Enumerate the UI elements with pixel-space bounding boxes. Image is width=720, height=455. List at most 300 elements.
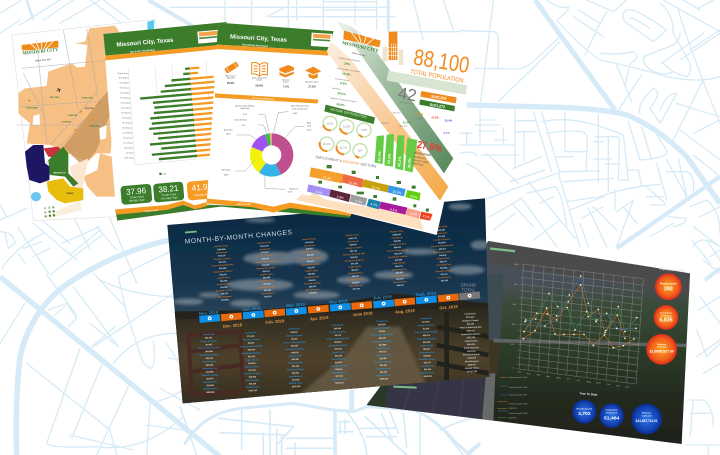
sector block values: 3.1% <box>410 211 418 217</box>
month columns: construction values above the timeline: $71,220 <box>261 252 269 254</box>
month columns: values below the timeline: Swimming Pool <box>288 362 303 365</box>
stat: high school: High School or <box>225 76 237 78</box>
heading: employment and industry: EMPLOYMENT & INDUSTRY SECTORS <box>315 155 377 169</box>
month columns: construction values above the timeline: $49,760 <box>262 263 270 267</box>
month columns: construction values above the timeline: Garage & Carport <box>345 246 362 250</box>
row one sector blocks <box>309 167 421 201</box>
month columns: values below the timeline: $376,418 <box>292 385 301 388</box>
month columns: construction values above the timeline: $28,410 <box>221 292 229 295</box>
demographic stat captions: Black alone <box>381 122 389 124</box>
timeline month labels: Mar. 2019 <box>286 301 306 308</box>
icon: diploma <box>224 61 239 74</box>
big number: 88,100 <box>412 44 471 78</box>
donut labels: 0.6% <box>241 125 246 127</box>
month columns: construction values above the timeline: $61,733 <box>350 250 358 253</box>
month columns: values below the timeline: $28,410 <box>206 377 215 380</box>
map: white gaps <box>33 114 107 140</box>
month columns: values below the timeline: Swimming Pool <box>420 352 435 354</box>
grand total column: Miscellaneous <box>465 361 479 363</box>
education list <box>330 56 360 107</box>
donut labels: 0.5% <box>243 114 247 116</box>
month columns: construction values above the timeline: Single Family <box>437 258 450 261</box>
stat: household income boxes: $100,206 <box>431 95 447 101</box>
month columns: values below the timeline: $63,480 <box>248 362 256 365</box>
income ring values: 21.2% <box>340 146 348 149</box>
month columns: values below the timeline: $59,940 <box>292 358 300 361</box>
decorative band: green <box>336 21 453 173</box>
month columns: construction values above the timeline: Commercial <box>436 231 448 235</box>
stat: 27.6% caption: SERVICES <box>411 163 424 167</box>
sector icons <box>318 165 429 212</box>
heading: reported month: Reported Month <box>659 267 685 273</box>
footer orange strip <box>207 199 352 216</box>
chart axis values <box>511 264 520 369</box>
map: diagonal corridor <box>63 85 113 167</box>
month columns: construction values above the timeline: Remodel & Repair <box>347 277 364 282</box>
month columns: values below the timeline: $47,356 <box>335 347 343 351</box>
month columns: values below the timeline: Residential Addition <box>417 337 437 341</box>
chart legend: 2018 YTD <box>509 408 518 410</box>
stat: bachelor's degree: 27.2% <box>308 85 316 89</box>
small demographic stats: 15.5% <box>403 120 411 124</box>
map: place names: RICHMOND <box>62 122 72 124</box>
month columns: values below the timeline: $31,908 <box>249 376 257 379</box>
month columns: construction values above the timeline: $46,205 <box>220 279 228 283</box>
month columns: construction values above the timeline: $376,418 <box>305 241 315 244</box>
grand total column: $356,008 <box>467 357 477 360</box>
stat: trade area median age: 37.96 <box>126 185 147 197</box>
month columns: values below the timeline: $9,014 <box>379 330 386 333</box>
footer band <box>115 199 221 221</box>
sector block values: 4.1% <box>390 207 398 213</box>
chart month labels: May <box>557 377 562 379</box>
month columns: construction values above the timeline: Swimming Pool <box>216 283 232 286</box>
stat: associate degree: 7.2% <box>283 85 290 89</box>
month columns: construction values above the timeline: $28,230 <box>264 296 273 298</box>
month columns: values below the timeline: $44,908 <box>379 343 387 347</box>
month columns: construction values above the timeline: $58,103 <box>262 258 270 261</box>
month columns: values below the timeline: Remodel & Repair <box>419 358 436 361</box>
month columns: construction values above the timeline: $63,480 <box>263 276 271 279</box>
footer orange strip <box>115 198 220 215</box>
month columns: values below the timeline: $412,330 <box>249 389 258 392</box>
heading: year to date: Year To Date <box>579 391 598 397</box>
grand total label: TOTAL <box>462 288 476 293</box>
month columns: construction values above the timeline: $32,417 <box>440 273 449 276</box>
stat: associate degree: Degree <box>283 81 289 83</box>
chart: age labels: 45 to 49 years <box>121 112 131 115</box>
month columns: construction values above the timeline: Commercial <box>391 236 403 240</box>
stat: some college <box>252 78 267 87</box>
month columns: values below the timeline: Residential Addition <box>285 347 305 351</box>
education list: 29% <box>344 61 351 66</box>
month columns: values below the timeline: Remodel & Repair <box>201 374 219 377</box>
chart legend: Permits Issued in 2018 <box>509 403 527 406</box>
month columns: values below the timeline: $37,615 <box>248 370 257 372</box>
logo: Missouri City: MISSOURI CITY <box>342 41 380 54</box>
month columns: construction values above the timeline: Residential Addition <box>301 262 321 267</box>
map: lower trade area shading <box>83 153 115 197</box>
education list: 8.8% <box>340 81 348 86</box>
donut labels: Pacific Islander alone <box>292 108 308 110</box>
stat: high school <box>225 76 237 85</box>
stat: median age: Median Age <box>194 192 211 197</box>
demographic stat captions: White alone <box>393 111 401 114</box>
stat: median age 42: 42 <box>397 84 418 105</box>
month columns: construction values above the timeline: $66,289 <box>394 240 402 243</box>
green column values: 42.1% <box>397 155 402 167</box>
grand total column: GRAND TOTAL <box>465 366 480 370</box>
month columns: values below the timeline: Residential Addition <box>200 353 220 357</box>
month columns: values below the timeline: $43,620 <box>291 351 299 354</box>
stat: median age <box>187 179 218 201</box>
month columns: construction values above the timeline: Miscellaneous <box>261 293 275 296</box>
grand total column <box>459 312 484 374</box>
month columns: construction values above the timeline: $59,014 <box>394 246 402 249</box>
month columns: values below the timeline: $5,392 <box>291 338 298 341</box>
donut labels: 18.8% <box>224 174 229 176</box>
stat: monthly revenue <box>646 334 677 365</box>
month columns: values below the timeline: $389,866 <box>206 392 216 394</box>
footer text: BIZ.MCTX.ORG <box>237 204 251 206</box>
month columns: values below the timeline: Commercial <box>288 327 300 331</box>
month columns: construction values above the timeline: Commercial <box>304 244 316 248</box>
month columns: values below the timeline: Remodel & Repair <box>330 364 348 368</box>
month columns: construction values above the timeline: $40,066 <box>440 266 448 270</box>
donut labels: Some other Race <box>234 119 247 122</box>
timeline month labels: Nov. 2018 <box>199 309 219 316</box>
stat: monthly revenue: Collected <box>657 346 667 349</box>
map: top corner lake <box>147 20 154 39</box>
education list: Bachelor's <box>332 88 341 91</box>
month columns: values below the timeline: Miscellaneous <box>421 365 435 368</box>
stat: associate degree: Associate <box>282 78 290 81</box>
panel: total population sheet <box>296 20 477 235</box>
sector block values: 5.5% <box>355 199 363 204</box>
stat: monthly permits issued: 393 <box>664 286 673 292</box>
month columns: construction values above the timeline: Commercial <box>259 247 271 251</box>
donut leader lines <box>235 112 304 189</box>
education list: Associate Degree <box>335 77 349 82</box>
timeline bar <box>199 291 480 323</box>
small demographic stats: 20.4% <box>445 119 453 123</box>
month columns: values below the timeline: $68,402 <box>334 327 342 330</box>
month columns: values below the timeline: $32,417 <box>424 361 432 364</box>
grand total column: $604,117 <box>467 329 476 333</box>
map: place names: MISSOURI CITY <box>53 172 67 174</box>
month columns: values below the timeline: $71,220 <box>247 336 255 338</box>
month columns: construction values above the timeline: $37,615 <box>263 283 272 286</box>
stat: YTD permits issued: 3,702 <box>578 411 591 417</box>
month columns: construction values above the timeline: GRAND TOTAL <box>434 225 449 229</box>
grand total column: $441,302 <box>467 350 476 353</box>
month columns: values below the timeline: $46,205 <box>206 363 214 367</box>
month columns: values below the timeline: $29,184 <box>424 368 432 371</box>
grand total column: Single Family <box>465 340 478 343</box>
month columns: values below the timeline: Swimming Pool <box>331 358 346 361</box>
month columns: construction values above the timeline: $412,330 <box>260 244 270 248</box>
month columns: construction values above the timeline: $59,940 <box>308 272 316 276</box>
chart: age labels: 75 to 79 years <box>119 82 129 85</box>
month columns: construction values above the timeline: Miscellaneous <box>306 289 320 292</box>
chart month labels: Jun <box>567 379 571 381</box>
map: place names: SUGAR LAND <box>82 96 94 99</box>
logo: Missouri City <box>342 31 381 58</box>
month columns: construction values above the timeline: $52,014 <box>262 270 271 273</box>
section band: diversity <box>215 93 327 104</box>
map: place names: HOUSTON <box>85 108 94 110</box>
month columns: construction values above the timeline: GRAND TOTAL <box>214 244 229 248</box>
month columns: values below the timeline: GRAND TOTAL <box>376 374 392 377</box>
logo: Missouri City: show me, too <box>35 57 51 63</box>
month columns: construction values above the timeline: $41,900 <box>220 286 229 289</box>
month columns: construction values above the timeline: Swimming Pool <box>259 280 275 283</box>
grand total column: $4,727,103 <box>467 370 478 373</box>
stat: trade area median age: Median Age <box>129 198 145 203</box>
stat: monthly inspections <box>654 305 678 330</box>
lower accent bar <box>393 386 417 389</box>
header title: Missouri City, Texas <box>230 34 288 44</box>
grand total column: $298,471 <box>468 363 477 367</box>
month columns: construction values above the timeline: Miscellaneous <box>218 296 232 299</box>
month columns: values below the timeline: $401,275 <box>335 381 345 385</box>
sector block values: 6.4% <box>315 190 323 195</box>
map: pale lower wash <box>43 200 82 217</box>
map: pale wedge <box>70 158 88 200</box>
education list: Graduate or Professional Degree <box>330 96 357 104</box>
donut labels: 18.4% <box>226 134 231 136</box>
income ring charts <box>320 116 371 158</box>
map: zone navy <box>25 145 50 183</box>
month columns: construction values above the timeline: Residential Addition <box>389 255 409 259</box>
month columns: construction values above the timeline: Fence & Retaining Wall <box>211 263 234 268</box>
chart month labels: Mar <box>537 374 541 377</box>
chart: age labels: 5 to 9 years <box>126 152 134 155</box>
month columns: values below the timeline: $418,092 <box>424 375 433 378</box>
month columns: construction values above the timeline: $43,620 <box>307 266 316 270</box>
small demographic stats: 20.1% <box>416 112 424 116</box>
month columns: construction values above the timeline: Remodel & Repair <box>259 285 276 289</box>
timeline month labels <box>199 290 459 329</box>
month columns: values below the timeline: $30,562 <box>335 369 344 371</box>
month columns: values below the timeline: $54,288 <box>205 350 214 353</box>
education list: Highest Level of Education <box>339 56 360 63</box>
chart gridlines <box>128 61 213 165</box>
grand total column: Garage & Carport <box>462 319 479 322</box>
chart axis values: 1000 <box>514 264 520 266</box>
small demographic stats <box>403 112 453 135</box>
month columns: values below the timeline: Garage & Carport <box>200 340 217 343</box>
chart month labels: Jan <box>518 371 522 373</box>
month columns: construction values above the timeline: $31,290 <box>396 278 404 281</box>
stat: YTD inspections <box>599 403 624 428</box>
stat: trade area average age <box>153 181 184 203</box>
month columns: construction values above the timeline: $60,871 <box>306 248 314 251</box>
grand total column: Remodel & Repair <box>463 353 480 356</box>
month columns: values below the timeline: Fence & Retaining Wall <box>198 346 220 350</box>
logo: Missouri City <box>22 39 59 63</box>
chart: male bars <box>138 67 197 161</box>
section band title: Diversity and Ethnicity <box>253 97 275 101</box>
map: place names: KATY AREA <box>50 96 60 99</box>
month columns: construction values above the timeline: $44,908 <box>395 258 403 262</box>
chart legend: 2019 YTD <box>509 417 518 419</box>
decorative band: orange <box>327 42 448 201</box>
income ring values <box>323 122 368 153</box>
stat: monthly inspections: 6,035 <box>659 318 673 324</box>
timeline month labels: May 2019 <box>329 298 348 305</box>
education list: Some College or No Degree <box>337 68 360 73</box>
month columns: values below the timeline: Garage & Carport <box>243 338 260 341</box>
income distribution heading <box>324 105 375 124</box>
chart: age labels: 55 to 59 years <box>121 102 131 105</box>
donut labels: 0.03% <box>293 113 298 115</box>
month columns: values below the timeline: GRAND TOTAL <box>420 371 436 375</box>
month columns: values below the timeline: Fence & Retaining Wall <box>327 337 349 341</box>
month columns: values below the timeline: Miscellaneous <box>377 368 391 371</box>
chart: age labels: 30 to 34 years <box>122 127 132 130</box>
stat: median age 42: MEDIAN AGE <box>399 101 414 106</box>
chart axis values: 600 <box>513 304 517 306</box>
stat: YTD revenue <box>631 404 662 434</box>
chart legend: Male <box>163 174 166 176</box>
month columns: construction values above the timeline: $64,135 <box>218 254 226 258</box>
timeline month labels: Dec. 2018 <box>223 322 243 329</box>
month columns: construction values above the timeline: $67,941 <box>219 260 227 264</box>
month columns: construction values above the timeline: Residential Addition <box>433 250 453 254</box>
month columns: construction values above the timeline: Swimming Pool <box>304 276 320 279</box>
month columns: construction values above the timeline: $401,275 <box>349 237 358 240</box>
icon: stack of books <box>279 65 294 78</box>
donut labels: Asian alone <box>224 129 233 132</box>
month columns: construction values above the timeline: Single Family <box>392 262 406 265</box>
month columns: construction values above the timeline: $53,871 <box>439 248 447 251</box>
month columns: values below the timeline: $49,760 <box>248 348 256 352</box>
chart month labels: Dec <box>626 387 630 389</box>
sector block values: 5.8% <box>336 195 344 200</box>
panel: age and sex distribution sheet <box>103 22 227 221</box>
month columns: values below the timeline: $64,135 <box>205 336 213 340</box>
month columns: construction values above the timeline: Single Family <box>348 266 362 269</box>
month columns: construction values above the timeline: $62,110 <box>351 269 359 272</box>
map: zone green <box>48 147 78 187</box>
timeline month labels: Feb. 2019 <box>265 318 285 325</box>
month columns: construction values above the timeline: Fence & Retaining Wall <box>299 256 322 261</box>
income ring values: 23.2% <box>323 143 331 146</box>
green column values: 30.2% <box>407 157 412 169</box>
stat: some college: Some College or No <box>252 78 267 80</box>
map: top corner green <box>136 30 149 41</box>
month columns: construction values above the timeline: $30,562 <box>352 282 360 284</box>
month columns: construction values above the timeline: Swimming Pool <box>392 269 407 272</box>
month columns: values below the timeline: Single Family <box>376 348 390 350</box>
month columns: construction values above the timeline: GRAND TOTAL <box>302 237 317 241</box>
demographic stat captions: Asian alone <box>399 125 407 128</box>
photo: pale road edge <box>482 373 495 422</box>
month columns: values below the timeline: $53,871 <box>423 335 431 337</box>
stat: trade area median age: Trade Area <box>129 194 144 200</box>
chart: age labels: 10 to 14 years <box>124 147 134 150</box>
month columns: construction values above the timeline: $27,104 <box>353 287 361 291</box>
month columns: values below the timeline: Swimming Pool <box>202 368 217 370</box>
month columns: construction values above the timeline: $23,526 <box>309 292 318 295</box>
map: location pins <box>28 99 100 131</box>
month columns: values below the timeline: $48,107 <box>291 344 299 348</box>
header orange strip <box>216 45 360 57</box>
panel: educational attainment sheet <box>207 23 363 218</box>
month columns: values below the timeline: Garage & Carport <box>286 334 303 337</box>
panel: trade area map sheet <box>12 19 173 221</box>
donut labels: Black <box>307 122 311 124</box>
stat: bachelor's degree <box>305 82 319 89</box>
stat: YTD permits issued <box>572 400 596 424</box>
header band <box>217 23 363 53</box>
month columns: values below the timeline: $62,110 <box>335 355 343 357</box>
month columns: values below the timeline: $6,733 <box>335 335 342 337</box>
chart: age labels: 65 to 69 years <box>120 92 130 95</box>
footer text: BIZ.MCTX.ORG <box>145 210 159 213</box>
month columns: construction values above the timeline: Remodel & Repair <box>216 288 233 293</box>
month columns: construction values above the timeline: $39,027 <box>352 276 360 278</box>
stat: monthly permits issued: Permits Issued <box>660 282 677 285</box>
panel: permits line chart sheet <box>367 241 693 444</box>
month columns: values below the timeline: $60,871 <box>291 332 299 334</box>
map: place names: STAFFORD <box>68 114 78 117</box>
stat: trade area average age: Average Age <box>161 195 178 201</box>
month columns: values below the timeline: Residential Addition <box>329 344 349 347</box>
month columns: values below the timeline: $50,819 <box>334 342 343 344</box>
map: road network <box>17 28 113 178</box>
sector block values: 12.2% <box>348 180 358 186</box>
month columns: values below the timeline: Residential Addition <box>373 340 393 343</box>
donut labels: 15.2% <box>288 192 293 194</box>
month columns: values below the timeline: $66,289 <box>378 324 386 326</box>
grand total label: GRAND <box>461 282 476 287</box>
month columns: values below the timeline: Swimming Pool <box>376 354 391 357</box>
big number label: TOTAL POPULATION <box>410 68 464 85</box>
photo: road band <box>493 339 693 347</box>
map: place names <box>27 96 100 195</box>
chart: age labels: 20 to 24 years <box>123 137 133 140</box>
grand total label <box>461 282 476 293</box>
map: trade area shading <box>18 26 121 162</box>
month columns: construction values above the timeline: $31,908 <box>264 290 272 292</box>
photo: building at left <box>488 273 503 340</box>
photo: clouds <box>173 203 489 307</box>
timeline month labels: July 2019 <box>373 294 392 300</box>
month columns: construction values above the timeline: $60,725 <box>395 266 404 268</box>
chart: age labels: 25 to 29 years <box>123 132 133 135</box>
month columns: values below the timeline: $35,118 <box>292 366 300 368</box>
logo box <box>311 33 332 47</box>
logo: Missouri City: show me, too <box>351 51 366 58</box>
logo box <box>197 30 220 44</box>
green column chart <box>375 134 417 172</box>
icon: open book <box>252 62 268 76</box>
stat: high school: 28.9% <box>227 81 235 85</box>
month columns: construction values above the timeline: $54,288 <box>219 267 227 270</box>
chart axis values: 0 <box>512 367 514 369</box>
top grey header band <box>488 241 690 295</box>
timeline month labels: Aug. 2019 <box>395 308 416 315</box>
chart legend: Permits Issued in 2016 <box>509 386 527 389</box>
month columns: values below the timeline: Fence & Retaining Wall <box>371 333 394 337</box>
chart month labels: Nov <box>616 385 621 387</box>
photo: dirt road <box>297 327 427 397</box>
sector block values <box>315 175 430 219</box>
timeline month labels: June 2019 <box>352 310 373 317</box>
month columns: construction values above the timeline: $52,376 <box>394 253 403 256</box>
